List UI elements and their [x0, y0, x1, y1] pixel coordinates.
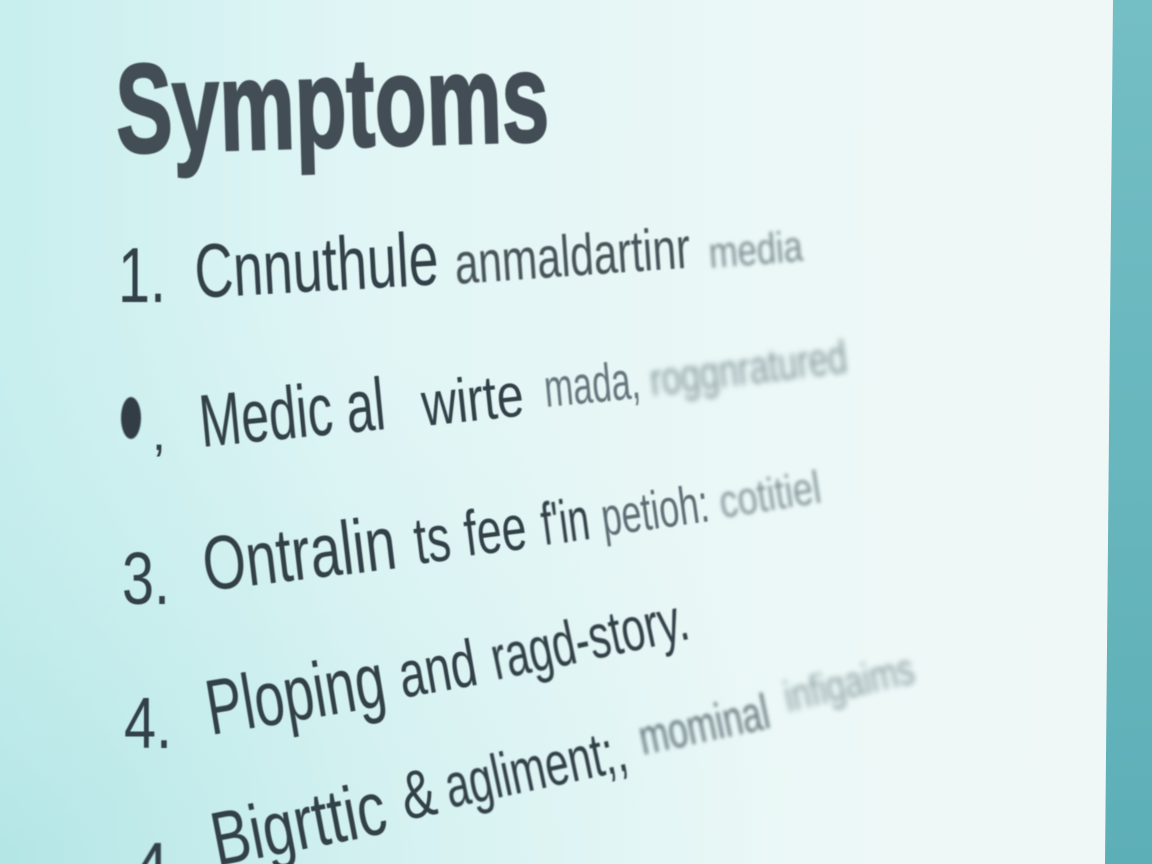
list item 2: mada, — [541, 350, 643, 419]
list item 2: roggnratured — [647, 330, 850, 406]
list item 2: wirte — [417, 361, 527, 440]
list item 3 — [122, 461, 824, 620]
list item 1: Cnnuthule — [192, 216, 441, 315]
list item 2 — [121, 330, 850, 463]
list item 1 — [118, 216, 805, 319]
list item 3: cotitiel — [715, 461, 824, 528]
list item 3: 3. — [122, 537, 170, 620]
list item 3: fee — [460, 491, 530, 570]
list item 1: anmaldartinr — [452, 216, 692, 297]
list item 4: ragd-story. — [485, 585, 695, 694]
list item 4: 4. — [124, 684, 172, 764]
list item 5: & — [394, 754, 442, 835]
title: Symptoms — [114, 27, 551, 180]
list item 2: Medic al — [196, 362, 389, 463]
list item 3: Ontralin — [198, 501, 401, 608]
list item 2: , — [152, 405, 166, 461]
list item 5: infigaims — [779, 644, 919, 722]
list item 3: ts — [410, 500, 454, 578]
list item 4 — [124, 585, 695, 764]
list item 1: 1. — [118, 231, 166, 319]
list item 5: mominal — [634, 684, 774, 766]
list item 5: agliment;, — [439, 716, 633, 822]
list item 3: f'in — [537, 485, 593, 558]
list item 1: media — [707, 222, 805, 278]
list item 4: Ploping — [199, 635, 391, 752]
blurred list number 2 — [121, 397, 141, 439]
list item 5 — [133, 644, 919, 864]
list item 3: petioh: — [597, 473, 713, 548]
list item 4: and — [393, 625, 482, 712]
right teal strip — [1105, 0, 1152, 864]
